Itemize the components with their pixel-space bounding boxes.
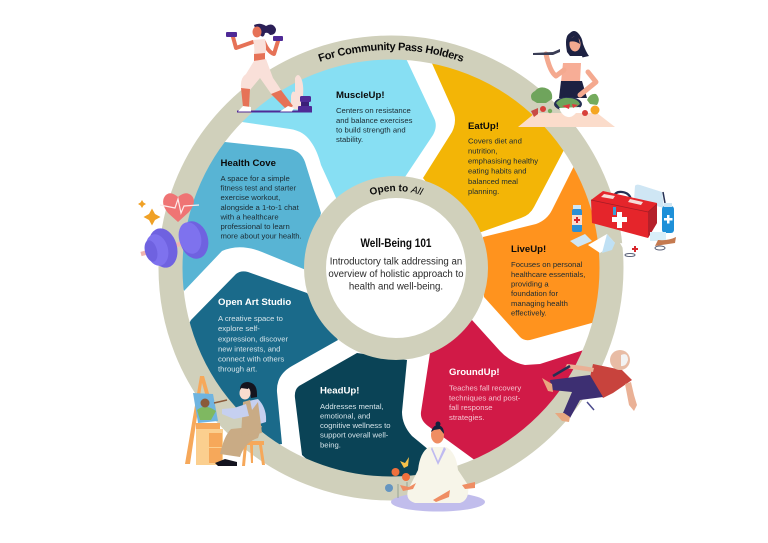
head <box>252 26 262 38</box>
panel: GroundUp <box>421 320 590 461</box>
panel: Health Cove <box>170 142 321 291</box>
canvas <box>193 393 218 423</box>
flowers <box>398 482 407 498</box>
text: Open Art Studio: A creative space to <box>218 314 283 323</box>
stool <box>242 441 264 445</box>
feet <box>542 378 553 392</box>
text: EatUp: emphasising healthy <box>468 156 538 166</box>
butterfly <box>400 457 409 468</box>
text: Open Art Studio: connect with others <box>218 354 284 364</box>
spoon <box>533 49 560 55</box>
text: GroundUp <box>449 367 521 422</box>
text: EatUp: Covers diet and <box>468 136 522 146</box>
legs <box>241 59 281 95</box>
arm <box>222 404 249 419</box>
white cross <box>612 212 627 228</box>
text: center description: Introductory talk addressing an <box>330 256 462 268</box>
pillar <box>291 75 304 110</box>
head <box>570 36 580 52</box>
hair <box>566 31 589 58</box>
text: GroundUp: Teaches fall recovery <box>449 384 521 392</box>
panel: MuscleUp <box>242 60 436 198</box>
text: Open Art Studio: through art. <box>218 364 257 374</box>
supplies <box>570 234 592 247</box>
vegetables <box>540 106 546 112</box>
text: GroundUp: fall response <box>449 403 493 412</box>
handle <box>613 192 631 200</box>
text: HeadUp: emotional, and <box>320 412 370 420</box>
robe <box>407 447 468 503</box>
text: EatUp: nutrition, <box>468 146 498 156</box>
icon: heart and dumbbell <box>138 193 212 271</box>
text: MuscleUp: and balance exercises <box>336 116 413 125</box>
text: center description: health and well-being. <box>349 282 443 292</box>
arm front <box>625 382 637 411</box>
red box <box>591 191 657 238</box>
text: EatUp <box>468 121 538 196</box>
cabinet <box>196 423 220 429</box>
panel: Open Art Studio <box>180 271 338 450</box>
torso <box>563 56 587 82</box>
head <box>610 350 630 370</box>
text: Health Cove: with a healthcare <box>220 212 279 222</box>
text: MuscleUp: Centers on resistance <box>336 106 411 115</box>
bowl <box>554 97 582 111</box>
text: Health Cove: professional to learn <box>220 222 290 231</box>
head <box>431 426 444 444</box>
text: MuscleUp: stability. <box>336 135 363 144</box>
text: Health Cove: fitness test and starter <box>220 184 297 192</box>
trousers <box>550 375 603 418</box>
text: MuscleUp: to build strength and <box>336 126 406 134</box>
torso <box>243 399 266 428</box>
top <box>253 39 266 54</box>
weights <box>300 96 311 102</box>
text: EatUp: balanced meal <box>468 177 518 186</box>
text: Open Art Studio: explore self- <box>218 324 260 333</box>
panel: LiveUp <box>483 167 600 340</box>
text: MuscleUp: MuscleUp! <box>336 90 385 101</box>
text: GroundUp: techniques and post- <box>449 394 521 402</box>
panel: EatUp <box>423 64 564 232</box>
icon: first aid kit <box>570 185 676 256</box>
icon: meditating person <box>385 422 485 512</box>
center circle <box>304 176 488 360</box>
text: EatUp: eating habits and <box>468 166 527 176</box>
easel <box>185 376 203 464</box>
ponytail and hair <box>254 24 276 37</box>
outer ring <box>170 48 612 488</box>
text: HeadUp <box>320 386 391 450</box>
arm rear <box>565 364 594 372</box>
text: LiveUp: effectively. <box>511 308 547 318</box>
text: MuscleUp <box>336 90 413 144</box>
text: LiveUp: providing a <box>511 280 549 288</box>
icon: painter at easel <box>185 376 266 466</box>
text: Open Art Studio: new interests, and <box>218 344 280 354</box>
text: EatUp: EatUp! <box>468 121 499 132</box>
heading: For Community Pass Holders: For Community Pass Holders <box>318 42 464 62</box>
hair and head <box>240 382 257 398</box>
text: GroundUp: strategies. <box>449 413 484 422</box>
text: Health Cove <box>220 158 302 240</box>
arms <box>546 54 564 76</box>
text: Health Cove: Health Cove <box>220 158 276 169</box>
text: GroundUp: GroundUp! <box>449 367 500 378</box>
heading: Open to All: Open to All <box>370 184 424 195</box>
text: HeadUp: cognitive wellness to <box>320 421 391 430</box>
text: Open Art Studio: Open Art Studio <box>218 297 291 308</box>
icon: woman exercising with dumbbells <box>226 24 312 112</box>
title: Well-Being 101: Well-Being 101 <box>360 236 432 250</box>
icon: chef with salad on a table <box>518 31 615 127</box>
bottle right <box>662 206 674 233</box>
lettuce <box>531 87 552 103</box>
text: HeadUp: support overall well- <box>320 430 389 440</box>
text: LiveUp: managing health <box>511 299 568 308</box>
mat <box>391 492 485 512</box>
text: Health Cove: alongside a 1-to-1 chat <box>220 203 300 212</box>
arms <box>233 37 253 48</box>
text: Health Cove: exercise workout, <box>220 193 280 202</box>
sparkles <box>144 208 160 226</box>
panels: activity wedges <box>182 60 600 476</box>
text: Health Cove: more about your health. <box>220 232 302 240</box>
cane <box>553 366 570 376</box>
text: LiveUp: foundation for <box>511 289 558 298</box>
text: center description: overview of holistic approach to <box>328 269 464 280</box>
panel: HeadUp <box>294 353 427 476</box>
torso <box>590 364 632 398</box>
heart <box>163 193 194 222</box>
text: LiveUp: Focuses on personal <box>511 260 583 269</box>
hands and foot <box>400 483 416 491</box>
text: HeadUp: Addresses mental, <box>320 402 384 411</box>
text: HeadUp: HeadUp! <box>320 386 359 396</box>
text: Open Art Studio: expression, discover <box>218 334 289 344</box>
text: LiveUp: LiveUp! <box>511 244 546 255</box>
text: LiveUp <box>511 244 585 318</box>
case behind <box>634 185 664 208</box>
text: center description <box>328 256 464 292</box>
bar <box>141 242 188 254</box>
table <box>518 113 615 127</box>
plates <box>144 225 182 271</box>
legs <box>220 426 262 457</box>
text: Open Art Studio <box>218 297 291 374</box>
bottle left <box>572 209 582 232</box>
text: LiveUp: healthcare essentials, <box>511 270 585 279</box>
text: Health Cove: A space for a simple <box>220 174 290 183</box>
text: EatUp: planning. <box>468 187 499 196</box>
text: HeadUp: being. <box>320 440 341 450</box>
icon: older man falling <box>542 350 637 422</box>
